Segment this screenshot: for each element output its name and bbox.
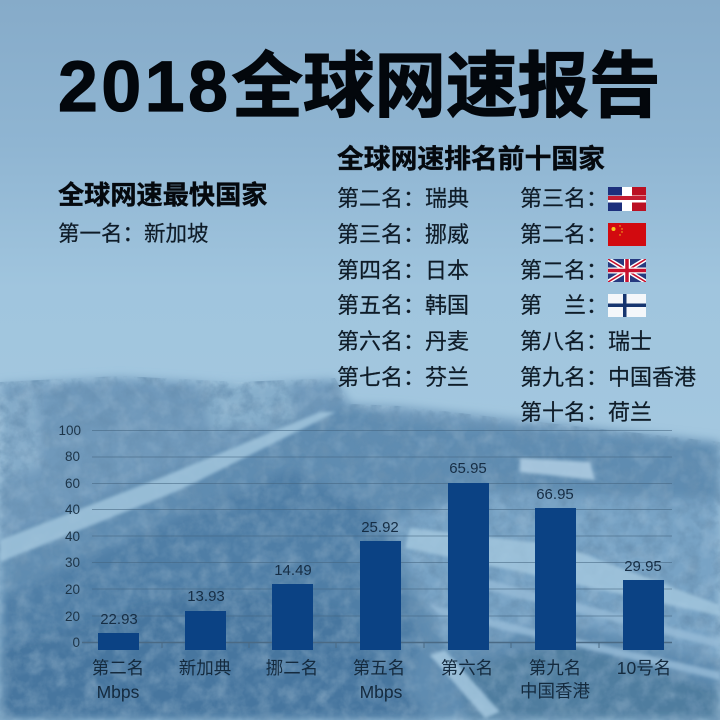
list: left column: 挪威 xyxy=(425,222,469,247)
bar chart: network speed xyxy=(58,423,672,702)
list: left column: 瑞典 xyxy=(425,186,469,211)
bars xyxy=(98,483,664,650)
list: right column: 第八名： xyxy=(520,329,608,354)
list: left column: 韩国 xyxy=(425,293,469,318)
list: left column: 第六名： xyxy=(337,329,425,354)
list: left column: 丹麦 xyxy=(425,329,469,354)
category labels: 新加典 xyxy=(179,658,231,678)
y axis labels: 60 xyxy=(65,476,80,491)
bar value labels: 22.93 xyxy=(100,611,138,628)
list: right column: 第十名： xyxy=(520,400,608,425)
y axis labels xyxy=(58,423,81,650)
list: right column: 瑞士 xyxy=(608,329,652,354)
heading: top ten: 全球网速排名前十国家 xyxy=(337,144,605,174)
chart grid lines xyxy=(92,430,672,616)
list: right column: 第三名： xyxy=(520,186,608,211)
icon: flag, blue white red xyxy=(608,187,646,211)
list: right column: 中国香港 xyxy=(608,365,696,390)
bar value labels: 66.95 xyxy=(536,486,574,503)
y axis labels: 40 xyxy=(65,502,80,517)
list: left column: 第二名： xyxy=(337,186,425,211)
title: 2018全球网速报告 xyxy=(58,47,660,127)
y axis labels: 20 xyxy=(65,609,80,624)
bar value labels xyxy=(100,460,662,628)
category labels xyxy=(92,658,671,702)
list: right column: 第二名： xyxy=(520,222,608,247)
category labels: 第二名 xyxy=(92,658,144,678)
y axis labels: 40 xyxy=(65,529,80,544)
category labels: 10号名 xyxy=(617,658,671,678)
list: left column: 第七名： xyxy=(337,365,425,390)
category labels: 挪二名 xyxy=(266,658,318,678)
panel: top ten countries xyxy=(337,144,696,425)
list: right column: 兰： xyxy=(564,293,608,318)
list: right column: 荷兰 xyxy=(608,400,652,425)
y axis labels: 0 xyxy=(72,635,80,650)
list: left column: 第三名： xyxy=(337,222,425,247)
list: right column xyxy=(520,186,696,425)
icon: flag of Finland xyxy=(608,294,646,317)
panel: fastest country xyxy=(58,180,268,246)
bar value labels: 25.92 xyxy=(361,519,399,536)
list: left column: 芬兰 xyxy=(425,365,469,390)
text: first place: 第一名：新加坡 xyxy=(58,222,209,246)
list: right column: 第二名： xyxy=(520,258,608,283)
category labels: 中国香港 xyxy=(520,681,590,701)
category labels: 第九名 xyxy=(529,658,581,678)
list: right column: 第九名： xyxy=(520,365,608,390)
category labels: Mbps xyxy=(97,682,140,702)
bar value labels: 14.49 xyxy=(274,562,312,579)
x axis xyxy=(82,642,672,648)
list: left column: 第五名： xyxy=(337,293,425,318)
list: right column: 第 xyxy=(520,293,542,318)
bar value labels: 29.95 xyxy=(624,558,662,575)
category labels: Mbps xyxy=(360,682,403,702)
icon: flag of UK xyxy=(608,259,646,282)
y axis labels: 20 xyxy=(65,582,80,597)
category labels: 第六名 xyxy=(441,658,493,678)
bar value labels: 13.93 xyxy=(187,588,225,605)
y axis labels: 100 xyxy=(58,423,81,438)
y axis labels: 80 xyxy=(65,449,80,464)
heading: fastest country: 全球网速最快国家 xyxy=(58,180,268,210)
list: left column: 日本 xyxy=(425,258,469,283)
list: left column: 第四名： xyxy=(337,258,425,283)
icon: flag of China xyxy=(608,223,646,246)
y axis labels: 30 xyxy=(65,555,80,570)
bar value labels: 65.95 xyxy=(449,460,487,477)
list: left column xyxy=(337,186,469,390)
category labels: 第五名 xyxy=(353,658,405,678)
